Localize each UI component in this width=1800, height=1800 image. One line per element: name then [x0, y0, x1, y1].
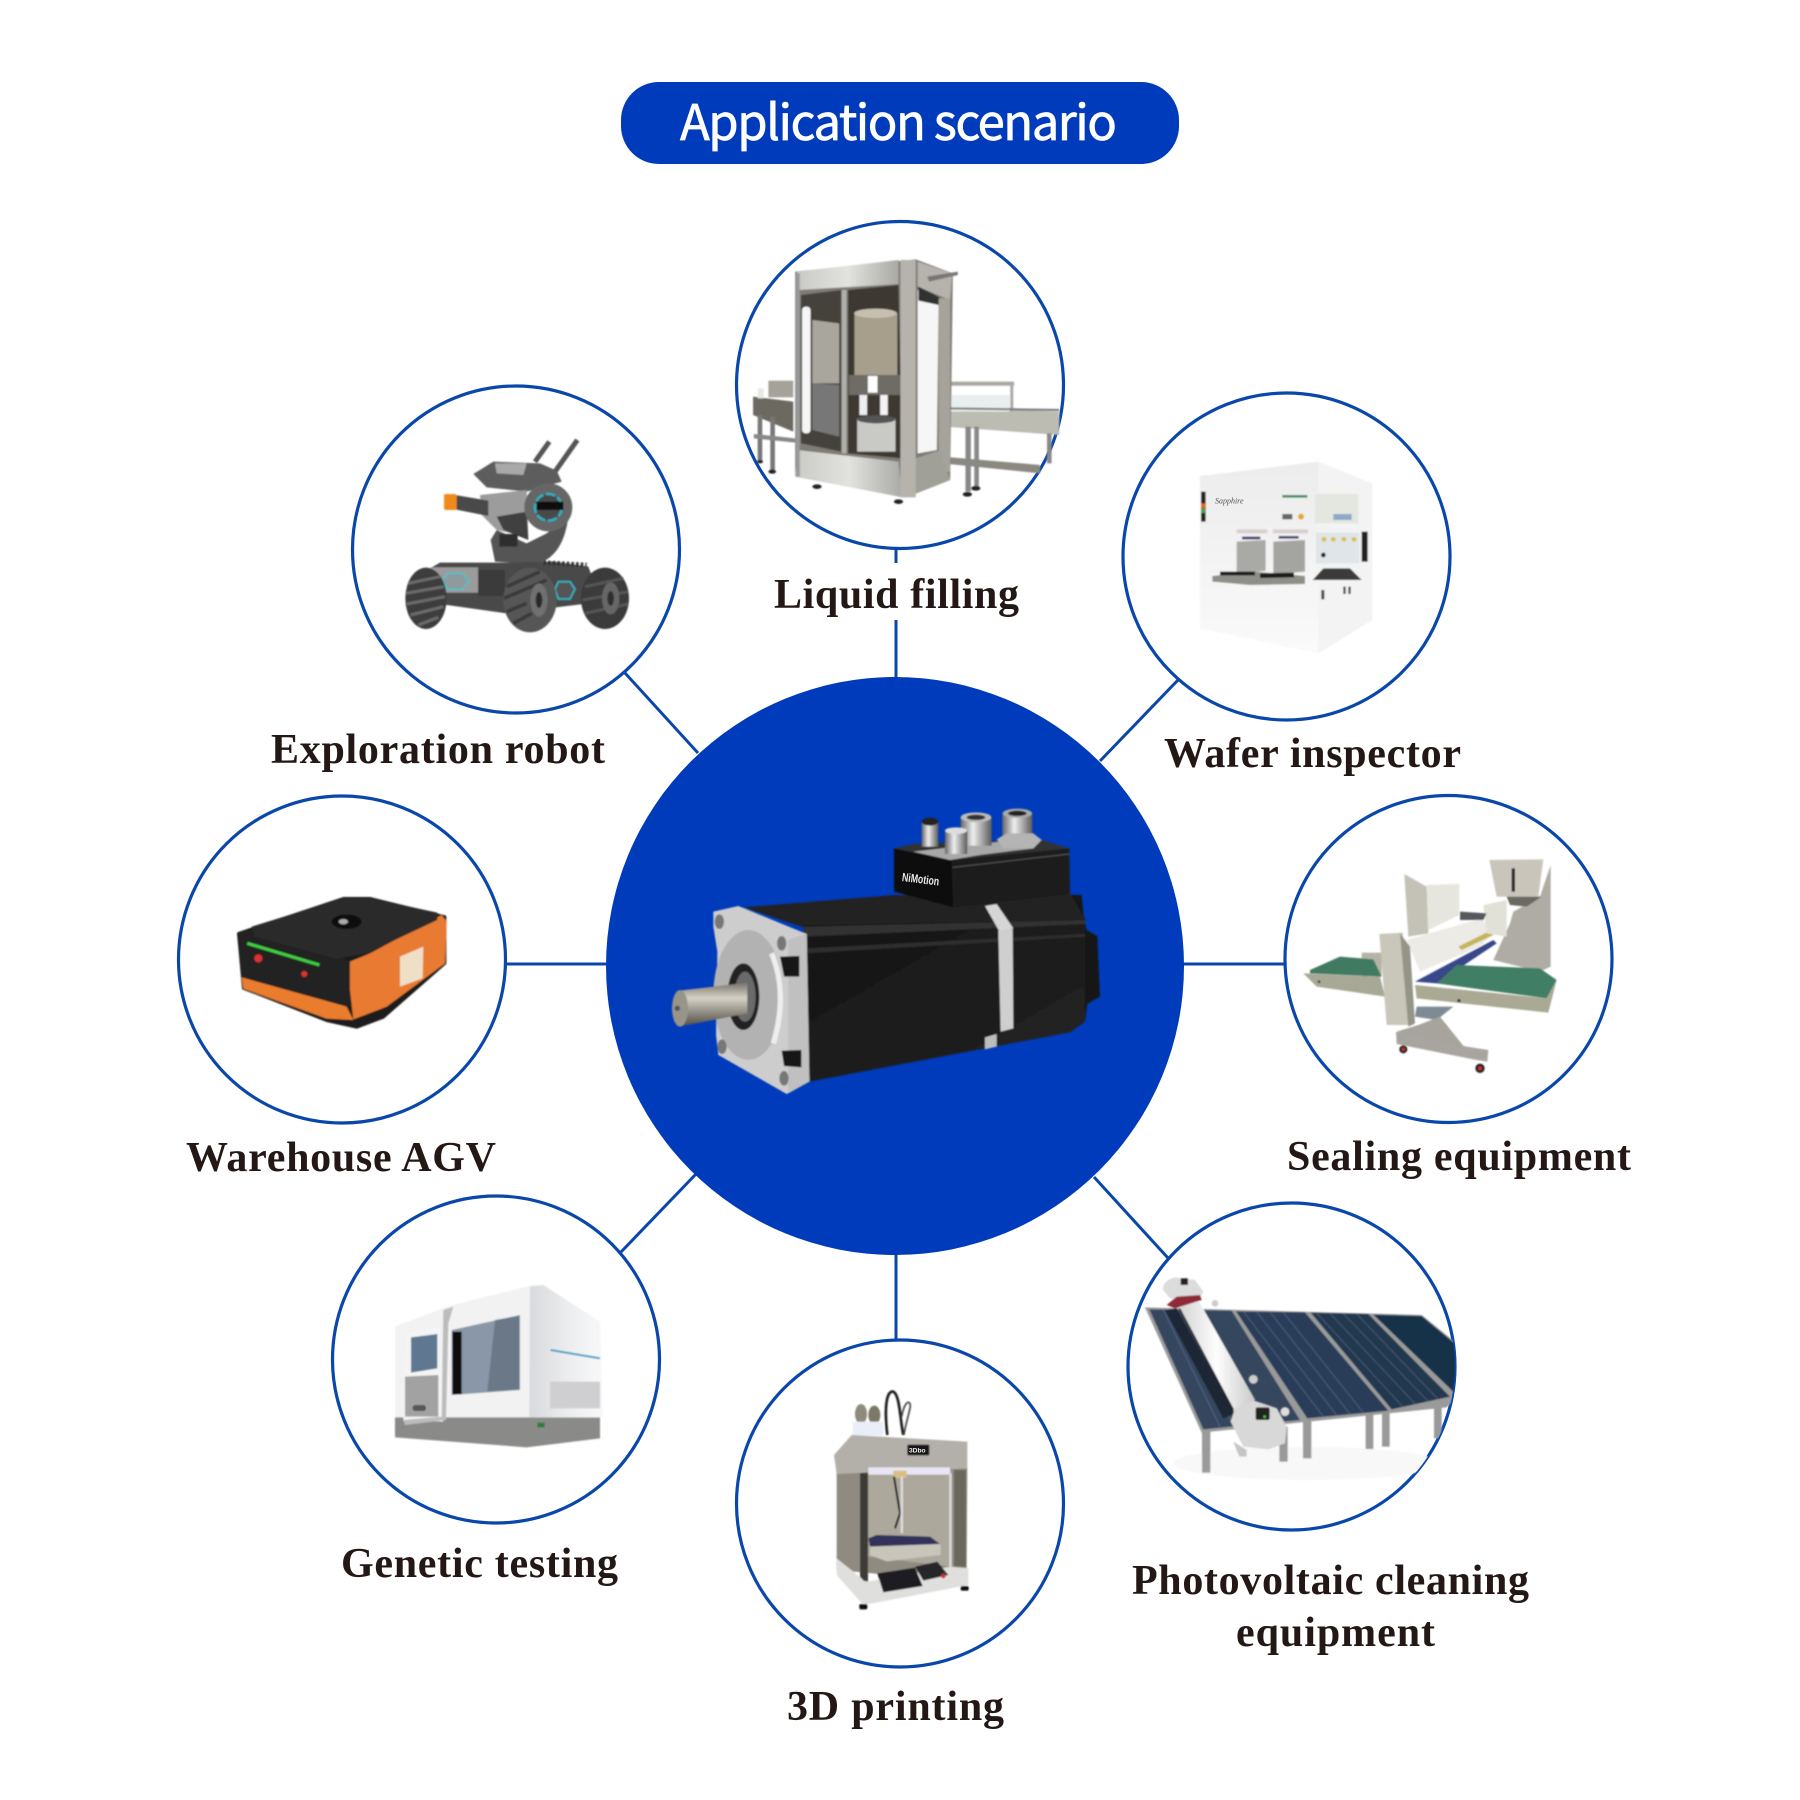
icon: filling machine [753, 259, 1059, 504]
label: liquid filling: Liquid filling [774, 572, 1019, 618]
icon: AGV [238, 898, 447, 1027]
icon: sealing machine [1303, 859, 1557, 1073]
icon: wafer inspector machine [1200, 462, 1372, 653]
panel: 3D printing [736, 1340, 1064, 1667]
panel: photovoltaic cleaning [1128, 1203, 1457, 1530]
label: warehouse AGV: Warehouse AGV [186, 1135, 496, 1181]
icon: sequencer [395, 1285, 603, 1447]
label: exploration robot: Exploration robot [271, 727, 605, 773]
panel: exploration robot [352, 386, 680, 713]
central hub with motor [606, 677, 1184, 1255]
label: photovoltaic cleaning equipment [1132, 1558, 1529, 1656]
panel: liquid filling [736, 222, 1064, 548]
title pill: Application scenario [680, 84, 1117, 155]
title pill [621, 82, 1179, 164]
panel: wafer inspector [1123, 393, 1450, 720]
label: genetic testing: Genetic testing [341, 1541, 618, 1587]
machine brand text: Sapphire [1215, 496, 1244, 505]
label: photovoltaic cleaning equipment: Photovoltaic cleaning [1132, 1558, 1529, 1604]
label: 3D printing: 3D printing [787, 1684, 1004, 1730]
panel: warehouse AGV [178, 796, 506, 1123]
label: sealing equipment: Sealing equipment [1287, 1134, 1631, 1180]
printer brand text: 3Dbo [909, 1448, 926, 1455]
icon: 3D printer [834, 1392, 969, 1609]
brand text: NiMotion [901, 870, 940, 889]
label: wafer inspector: Wafer inspector [1164, 731, 1461, 777]
icon: servo motor [672, 809, 1100, 1094]
panel: sealing equipment [1285, 796, 1612, 1122]
panel: genetic testing [332, 1196, 660, 1523]
label: photovoltaic cleaning equipment: equipment [1236, 1610, 1435, 1656]
connector lines [506, 548, 1285, 1340]
icon: solar panels with cleaning robot [1145, 1277, 1457, 1480]
icon: robot [405, 440, 629, 632]
